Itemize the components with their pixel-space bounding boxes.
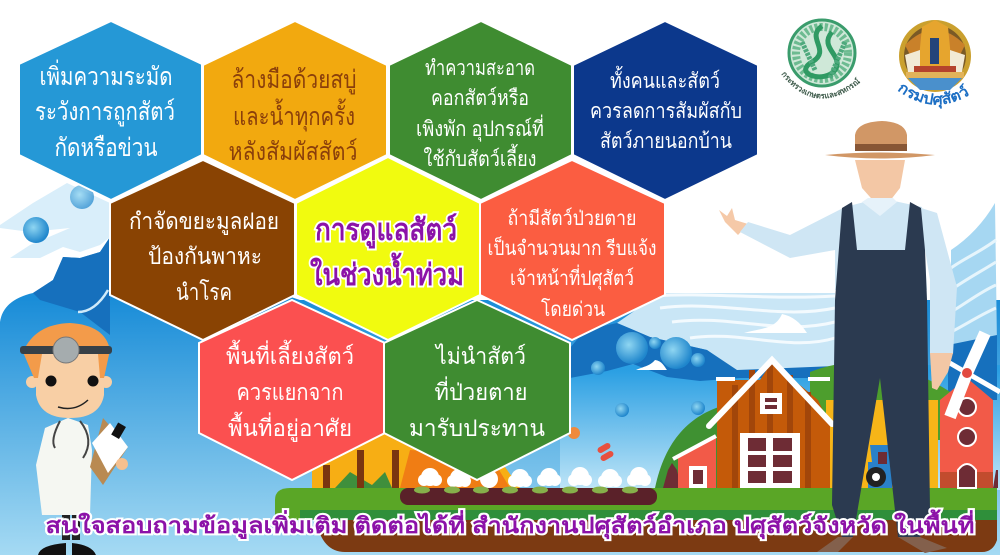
text: wash hands: ล้างมือด้วยสบู่ xyxy=(232,66,356,95)
text: keep alert xyxy=(35,59,175,162)
centre sky xyxy=(560,365,1000,490)
soil row xyxy=(400,488,657,505)
logo: department of livestock xyxy=(898,20,971,109)
logo: ministry of agriculture: กระทรวงเกษตรและสหกรณ์ xyxy=(781,72,860,99)
doctor legs and shoes xyxy=(62,515,80,540)
trees xyxy=(312,433,520,489)
small red shed xyxy=(673,436,716,488)
text: housing: พื้นที่เลี้ยงสัตว์ xyxy=(226,340,354,369)
logo: department of livestock: กรมปศุสัตว์ xyxy=(898,83,969,109)
farmer shoes xyxy=(817,537,947,553)
farmer right arm xyxy=(918,207,957,354)
text: report: โดยด่วน xyxy=(541,298,605,321)
text: no sick meat: ที่ป่วยตาย xyxy=(434,376,528,405)
text: keep alert: ระวังการถูกสัตว์ xyxy=(35,98,175,127)
text: clean pens: ใช้กับสัตว์เลี้ยง xyxy=(424,144,536,171)
hill: green behind farmer xyxy=(810,363,960,440)
doctor clipboard xyxy=(90,418,128,485)
farmer collar xyxy=(862,198,897,216)
farmer overalls xyxy=(832,202,930,537)
green and brown earth strip xyxy=(275,488,997,520)
hill: yellow xyxy=(826,400,938,488)
text: wash hands xyxy=(228,66,358,166)
farmer hat xyxy=(825,121,935,158)
title xyxy=(310,213,464,292)
hexagon: no sick meat xyxy=(384,300,570,480)
text: report: เจ้าหน้าที่ปศุสัตว์ xyxy=(510,264,634,291)
bottom contact line: สนใจสอบถามข้อมูลเพิ่มเติม ติดต่อได้ที่ สำนักงานปศุสัตว์อำเภอ ปศุสัตว์จังหวัด ในพื้นที่ xyxy=(46,509,974,540)
hexagon: wash hands xyxy=(203,21,387,200)
hexagon: report xyxy=(480,160,665,340)
farmer left arm and torso xyxy=(740,198,927,290)
doctor coat xyxy=(36,418,92,515)
bubbles left xyxy=(23,217,49,243)
water background xyxy=(0,183,1000,555)
text: keep alert: เพิ่มความระมัด xyxy=(40,59,172,91)
wave bubbles xyxy=(616,332,648,364)
hill: green behind barn xyxy=(655,405,730,488)
hexagon: clean pens xyxy=(389,21,572,200)
cloud xyxy=(636,360,667,370)
text: no sick meat xyxy=(409,343,545,441)
text: no sick meat: ไม่นำสัตว์ xyxy=(434,343,526,369)
text: no sick meat: มารับประทาน xyxy=(409,415,545,441)
text: limit contact: ควรลดการสัมผัสกับ xyxy=(590,100,742,123)
text: clean pens: เพิงพัก อุปกรณ์ที่ xyxy=(416,114,544,142)
tractor xyxy=(866,445,892,488)
decorative flowers xyxy=(568,427,615,462)
hexagon: centre title xyxy=(296,157,480,340)
text: wash hands: หลังสัมผัสสัตว์ xyxy=(228,138,358,166)
text: keep alert: กัดหรือข่วน xyxy=(54,134,158,162)
text: clean pens xyxy=(416,57,544,171)
pale wave band xyxy=(617,293,835,372)
farmer xyxy=(719,121,957,553)
hexagon: waste xyxy=(110,160,295,340)
right pale wave xyxy=(951,203,997,345)
text: waste: นำโรค xyxy=(176,279,232,305)
text: waste xyxy=(129,208,279,305)
barn xyxy=(709,360,832,488)
title: ในช่วงน้ำท่วม xyxy=(310,252,464,292)
left dark wave xyxy=(33,237,110,335)
text: report xyxy=(488,207,656,321)
farmer hand right xyxy=(930,353,953,390)
cotton plants xyxy=(418,467,651,488)
farmer hand left xyxy=(719,208,748,235)
text: clean pens: ทำความสะอาด xyxy=(425,57,535,80)
doctor stethoscope xyxy=(53,421,88,458)
text: waste: ป้องกันพาหะ xyxy=(148,243,262,269)
doctor character xyxy=(20,323,128,555)
text: housing xyxy=(226,340,354,442)
hexagon: keep alert xyxy=(19,21,202,200)
text: report: ถ้ามีสัตว์ป่วยตาย xyxy=(508,207,636,230)
title: การดูแลสัตว์ xyxy=(315,213,457,249)
doctor head xyxy=(20,323,112,418)
logo: ministry of agriculture xyxy=(781,18,860,99)
hexagon: limit contact xyxy=(573,21,758,200)
farmer head xyxy=(855,160,905,206)
hexagon: housing xyxy=(199,300,385,480)
right dark wave xyxy=(948,335,997,400)
text: limit contact: ทั้งคนและสัตว์ xyxy=(610,66,720,93)
text: housing: ควรแยกจาก xyxy=(236,379,344,405)
dark wave band xyxy=(560,323,835,381)
text: report: เป็นจำนวนมาก รีบแจ้ง xyxy=(488,235,656,260)
text: limit contact xyxy=(590,66,742,153)
windmill xyxy=(940,333,1000,488)
text: waste: กำจัดขยะมูลฝอย xyxy=(129,208,279,235)
text: housing: พื้นที่อยู่อาศัย xyxy=(228,412,352,442)
left water body xyxy=(0,237,1000,555)
text: wash hands: และน้ำทุกครั้ง xyxy=(233,98,355,132)
text: limit contact: สัตว์ภายนอกบ้าน xyxy=(600,129,732,153)
left splash xyxy=(0,183,110,258)
small scarecrow figures xyxy=(663,463,998,488)
text: clean pens: คอกสัตว์หรือ xyxy=(431,86,529,110)
ground scene xyxy=(275,333,1000,552)
